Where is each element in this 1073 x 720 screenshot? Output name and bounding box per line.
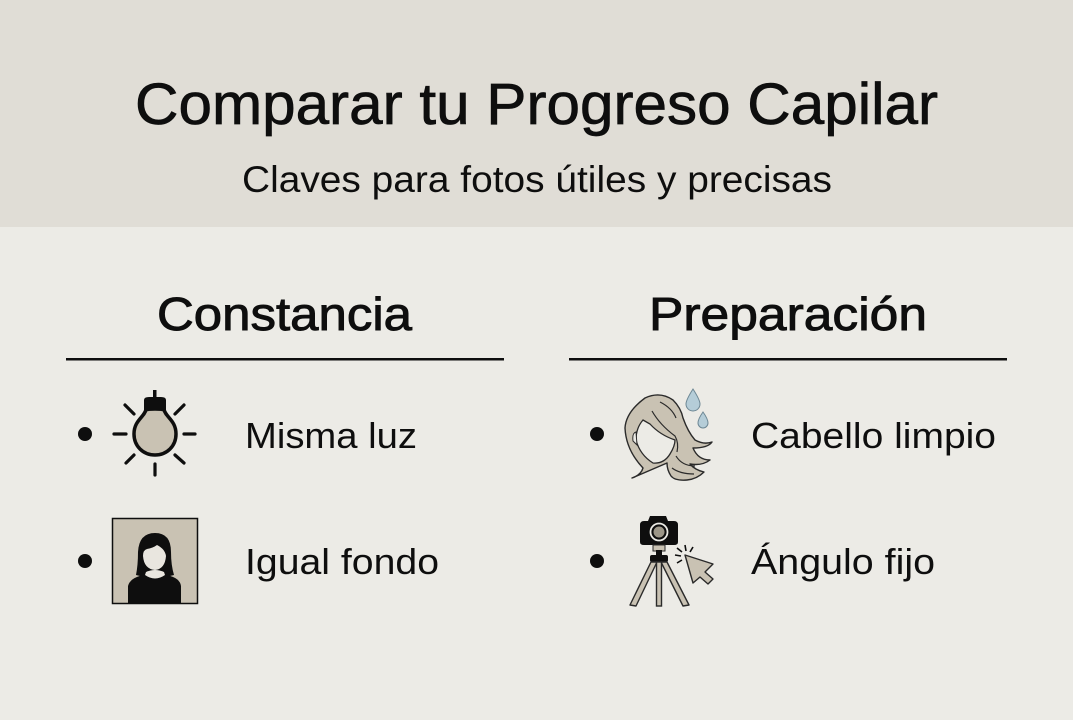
item: igual fondo (78, 518, 439, 604)
item: angulo fijo (590, 516, 935, 606)
title: Comparar tu Progreso Capilar (135, 72, 938, 137)
item: cabello limpio (590, 389, 996, 480)
label: Ángulo fijo (751, 541, 935, 582)
bullet (78, 427, 92, 441)
item: misma luz (78, 390, 417, 475)
header band (0, 0, 1073, 227)
subtitle: Claves para fotos útiles y precisas (242, 159, 832, 200)
label: Cabello limpio (751, 415, 996, 456)
icon: portrait on plain background (112, 518, 198, 604)
icon: light bulb (114, 390, 195, 475)
heading rule (66, 358, 504, 360)
bullet (590, 554, 604, 568)
heading: preparacion: Preparación (649, 288, 927, 340)
panel: constancia (66, 288, 504, 604)
label: Misma luz (245, 415, 417, 456)
icon: camera on tripod with cursor (630, 516, 713, 606)
heading rule (569, 358, 1007, 360)
bullet (590, 427, 604, 441)
label: Igual fondo (245, 541, 439, 582)
icon: clean hair with water drops (625, 389, 712, 480)
panel: preparacion (569, 288, 1007, 606)
heading: constancia: Constancia (157, 288, 412, 340)
bullet (78, 554, 92, 568)
